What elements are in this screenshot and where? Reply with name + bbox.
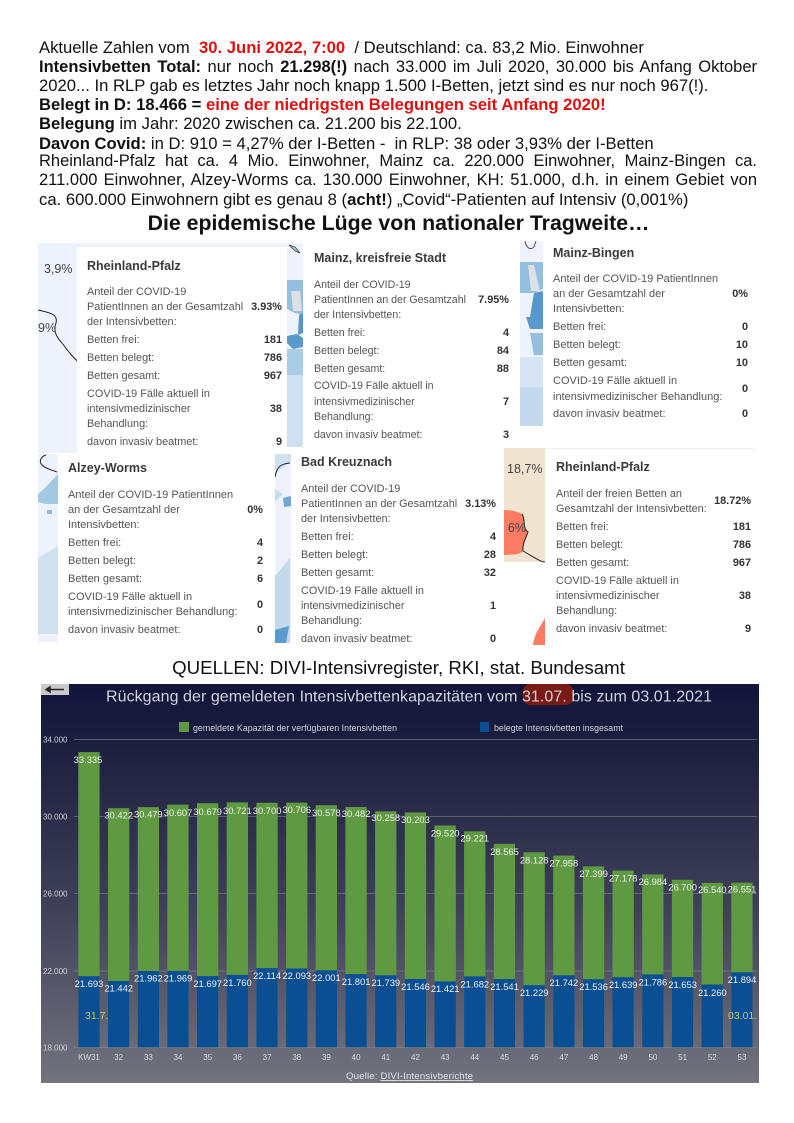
capacity value labels: 30.203 — [401, 814, 430, 825]
occupied value labels: 21.742 — [550, 977, 578, 988]
table: bed figures: 4 — [503, 326, 509, 338]
table: bed figures: der Intensivbetten: — [87, 316, 177, 328]
table: bed figures: Betten belegt: — [553, 338, 621, 350]
table: bed figures: PatientInnen an der Gesamtzahl — [314, 294, 466, 306]
table: bed figures: Betten belegt: — [314, 344, 379, 356]
table: bed figures: 1 — [490, 600, 496, 612]
table: bed figures: intensivmedizinischer — [314, 396, 415, 408]
grid lines and y axis: 34.000 — [43, 736, 68, 744]
table: bed figures: intensivmedizinischer — [87, 402, 191, 414]
table: bed figures: 0 — [742, 320, 748, 332]
table: bed figures: COVID-19 Fälle aktuell in — [553, 374, 677, 386]
table: bed figures: 0 — [742, 382, 748, 394]
heading: epidemic lie: Die epidemische Lüge von nationaler Tragweite… — [148, 211, 649, 235]
table: bed figures: 967 — [733, 556, 751, 568]
table: bed figures: Bad Kreuznach — [301, 455, 392, 469]
capacity value labels: 28.128 — [520, 854, 549, 866]
x axis labels: 32 — [114, 1053, 124, 1062]
occupied value labels: 21.546 — [401, 981, 430, 992]
table: bed figures — [314, 251, 509, 440]
x axis labels: 36 — [233, 1053, 242, 1062]
table: bed figures: 2 — [257, 554, 263, 566]
table: bed figures: 38 — [739, 590, 751, 602]
table: bed figures: 7.95% — [478, 294, 509, 306]
table: bed figures: intensivmedizinischer Behandlung: — [68, 606, 237, 618]
table: bed figures: Betten frei: — [314, 326, 365, 338]
occupied value labels — [75, 970, 756, 998]
blue occupied bars — [78, 968, 753, 1047]
x axis labels — [78, 1053, 747, 1062]
table: bed figures: Betten belegt: — [87, 352, 154, 364]
table: bed figures — [301, 455, 496, 643]
panel: Rheinland-Pfalz free beds: 18,7% — [507, 462, 542, 476]
text block: current figures — [39, 38, 757, 209]
occupied value labels: 21.229 — [520, 987, 549, 998]
capacity value labels: 30.479 — [134, 808, 163, 820]
x axis labels: 48 — [589, 1053, 599, 1062]
table: bed figures: 0% — [247, 504, 263, 516]
map: Mainz region strip — [287, 243, 303, 447]
grid lines and y axis: 30.000 — [43, 812, 68, 822]
table: bed figures: Behandlung: — [556, 604, 617, 616]
table: bed figures: intensivmedizinischer — [556, 590, 660, 602]
table: bed figures: der Intensivbetten: — [314, 308, 401, 320]
table: bed figures: davon invasiv beatmet: — [314, 428, 422, 440]
occupied value labels: 21.962 — [134, 972, 163, 984]
table: bed figures: davon invasiv beatmet: — [553, 408, 666, 420]
x axis labels: 37 — [263, 1053, 272, 1062]
grid lines and y axis — [43, 736, 757, 1052]
table: bed figures: 3.13% — [465, 498, 496, 510]
table: bed figures: 6 — [257, 572, 263, 584]
capacity value labels: 30.721 — [223, 805, 252, 816]
capacity value labels: 26.700 — [668, 882, 697, 892]
table: bed figures — [556, 460, 751, 634]
table: bed figures: PatientInnen an der Gesamtzahl — [301, 498, 457, 510]
table: bed figures: Anteil der COVID-19 PatientInnen — [553, 272, 718, 284]
capacity value labels — [74, 754, 756, 895]
table: bed figures: 3 — [503, 428, 509, 440]
table: bed figures: 38 — [270, 402, 282, 414]
legend: belegte Intensivbetten insgesamt — [494, 723, 624, 733]
table: bed figures: Mainz, kreisfreie Stadt — [314, 251, 446, 265]
text block: current figures: Intensivbetten Total: nur noch 21.298(!) nach 33.000 im Juli 2020, 30.000 bis Anfang Oktober — [39, 58, 757, 76]
table: bed figures: Anteil der COVID-19 PatientInnen — [68, 488, 233, 500]
x axis labels: 43 — [441, 1053, 450, 1062]
legend — [179, 722, 624, 733]
table: bed figures: Betten belegt: — [556, 538, 623, 550]
table: bed figures: Gesamtzahl der Intensivbetten: — [556, 502, 707, 514]
date annotations: 31.7. — [85, 1010, 108, 1022]
x axis labels: 41 — [381, 1053, 391, 1062]
table: bed figures: davon invasiv beatmet: — [68, 624, 181, 636]
occupied value labels: 21.536 — [579, 981, 608, 992]
occupied value labels: 21.541 — [490, 981, 519, 992]
x axis labels: 38 — [292, 1053, 302, 1062]
table: bed figures: 3.93% — [251, 300, 282, 312]
x axis labels: 40 — [352, 1053, 361, 1062]
table: bed figures: Alzey-Worms — [68, 461, 147, 475]
x axis labels: 49 — [619, 1053, 628, 1062]
table: bed figures: 0 — [257, 624, 263, 636]
table: bed figures: Betten frei: — [556, 520, 609, 532]
x axis labels: 53 — [738, 1053, 747, 1062]
occupied value labels: 21.801 — [342, 976, 370, 987]
text block: current figures: 211.000 Einwohner, Alzey-Worms ca. 130.000 Einwohner, KH: 51.000, d.h. in einem Gebiet von — [39, 171, 757, 189]
x axis labels: 33 — [144, 1053, 153, 1062]
x axis labels: 46 — [530, 1053, 539, 1062]
table: bed figures: Mainz-Bingen — [553, 246, 634, 260]
x axis labels: 51 — [678, 1053, 688, 1062]
occupied value labels: 21.760 — [223, 977, 252, 988]
chart title: Rückgang der gemeldeten Intensivbettenkapazitäten vom 31.07. bis zum 03.01.2021 — [106, 688, 712, 706]
panel: Mainz-Bingen — [520, 241, 755, 426]
capacity value labels: 33.335 — [74, 754, 102, 765]
x axis labels: 45 — [500, 1053, 509, 1062]
table: bed figures — [553, 246, 748, 420]
capacity value labels: 28.565 — [490, 846, 519, 857]
occupied value labels: 21.786 — [639, 976, 667, 988]
source note: Quelle: DIVI-Intensivberichte — [346, 1071, 473, 1082]
table: bed figures: Betten gesamt: — [553, 356, 627, 368]
table: bed figures: 786 — [264, 352, 282, 364]
occupied value labels: 21.697 — [193, 978, 222, 989]
table: bed figures — [68, 461, 263, 636]
capacity value labels: 30.578 — [312, 807, 341, 818]
grid lines and y axis: 18.000 — [43, 1044, 68, 1052]
occupied value labels: 21.421 — [431, 983, 460, 994]
table: bed figures: 9 — [745, 622, 751, 634]
occupied value labels: 21.739 — [371, 977, 400, 988]
table: bed figures: 181 — [733, 520, 751, 532]
heading: sources: QUELLEN: DIVI-Intensivregister, RKI, stat. Bundesamt — [172, 657, 625, 678]
occupied value labels: 22.114 — [253, 970, 281, 981]
table: bed figures: Betten belegt: — [301, 548, 368, 560]
table: bed figures: Anteil der COVID-19 — [301, 482, 400, 494]
table: bed figures: Betten frei: — [68, 536, 121, 548]
map: Alzey-Worms strip — [38, 454, 58, 642]
text block: current figures: 2020... In RLP gab es letztes Jahr noch knapp 1.500 I-Betten, jetzt sind es nur noch 967(!). — [39, 76, 708, 95]
occupied value labels: 21.442 — [104, 982, 133, 994]
grid lines and y axis: 22.000 — [43, 967, 68, 976]
occupied value labels: 21.894 — [728, 974, 756, 985]
capacity value labels: 30.482 — [342, 808, 370, 819]
x axis labels: 39 — [322, 1053, 331, 1062]
table: bed figures: 10 — [736, 356, 748, 368]
map: free-bed share strip — [504, 448, 754, 645]
panel: Rheinland-Pfalz covid share — [38, 243, 287, 453]
x axis labels: KW31 — [78, 1053, 100, 1062]
table: bed figures: 4 — [257, 536, 263, 548]
table: bed figures: Betten frei: — [553, 320, 606, 332]
date annotations: 03.01. — [728, 1010, 757, 1022]
table: bed figures: 32 — [484, 566, 496, 578]
capacity value labels: 26.540 — [698, 884, 727, 895]
x axis labels: 35 — [203, 1053, 213, 1062]
table: bed figures: 9 — [276, 436, 282, 448]
panel: Rheinland-Pfalz covid share: 3,9% — [44, 262, 72, 276]
table: bed figures: Betten gesamt: — [301, 566, 374, 578]
capacity value labels: 27.178 — [609, 872, 638, 884]
panel: Rheinland-Pfalz covid share: 9% — [38, 321, 56, 335]
x axis labels: 34 — [174, 1053, 183, 1062]
occupied value labels: 21.969 — [164, 972, 192, 984]
text block: current figures: Belegung im Jahr: 2020 zwischen ca. 21.200 bis 22.100. — [39, 114, 462, 133]
table: bed figures: PatientInnen an der Gesamtzahl — [87, 300, 243, 312]
table: bed figures: 88 — [497, 362, 509, 374]
map: Bad Kreuznach strip — [275, 454, 291, 643]
table: bed figures: 181 — [264, 334, 282, 346]
table: bed figures: Betten gesamt: — [68, 572, 142, 584]
text block: current figures: Aktuelle Zahlen vom 30. Juni 2022, 7:00 / Deutschland: ca. 83,2 Mio. Einwohner — [39, 38, 644, 57]
date annotations — [85, 1010, 757, 1022]
table: bed figures: der Intensivbetten: — [301, 512, 391, 524]
table: bed figures: Behandlung: — [314, 410, 374, 422]
table: bed figures: Rheinland-Pfalz — [87, 259, 181, 273]
text block: current figures: ca. 600.000 Einwohnern gibt es genau 8 (acht!) „Covid“-Patienten auf Intensiv (0,001%) — [39, 190, 688, 209]
table: bed figures: Rheinland-Pfalz — [556, 460, 650, 474]
map: Mainz-Bingen strip — [520, 241, 543, 426]
table: bed figures: Betten gesamt: — [87, 370, 160, 382]
green capacity bars — [78, 752, 753, 1047]
table: bed figures: COVID-19 Fälle aktuell in — [314, 380, 434, 392]
x axis labels: 44 — [470, 1053, 480, 1062]
panel: Rheinland-Pfalz free beds — [504, 448, 754, 646]
text block: current figures: Belegt in D: 18.466 = eine der niedrigsten Belegungen seit Anfang 2020! — [39, 95, 606, 114]
text block: current figures: Davon Covid: in D: 910 = 4,27% der I-Betten - in RLP: 38 oder 3,93% der I-Betten — [39, 134, 654, 153]
table: bed figures: 786 — [733, 538, 751, 550]
table: bed figures: COVID-19 Fälle aktuell in — [68, 590, 192, 602]
table: bed figures: Anteil der COVID-19 — [87, 286, 186, 298]
table: bed figures: 967 — [264, 370, 282, 382]
table: bed figures: 0 — [742, 408, 748, 420]
table: bed figures: Intensivbetten: — [553, 302, 625, 314]
table: bed figures: 84 — [497, 344, 509, 356]
capacity value labels: 30.258 — [371, 812, 400, 823]
capacity value labels: 30.700 — [253, 805, 281, 816]
table: bed figures: 0% — [732, 288, 748, 300]
panel: Bad Kreuznach — [275, 454, 504, 643]
x axis labels: 42 — [411, 1053, 420, 1062]
table: bed figures: Betten belegt: — [68, 554, 136, 566]
occupied value labels: 21.653 — [668, 979, 697, 990]
text block: current figures: Rheinland-Pfalz hat ca. 4 Mio. Einwohner, Mainz ca. 220.000 Einwohner, Mainz-Bingen ca. — [39, 152, 757, 170]
capacity value labels: 27.958 — [550, 858, 578, 868]
capacity value labels: 30.422 — [104, 810, 133, 820]
occupied value labels: 21.693 — [75, 978, 103, 989]
table: bed figures: davon invasiv beatmet: — [87, 436, 198, 448]
table: bed figures: 4 — [490, 530, 496, 542]
occupied value labels: 21.260 — [698, 987, 727, 998]
back button icon — [41, 684, 69, 695]
table: bed figures: an der Gesamtzahl der — [553, 288, 665, 300]
panel: Rheinland-Pfalz free beds: 6% — [508, 521, 526, 535]
table: bed figures: an der Gesamtzahl der — [68, 504, 180, 516]
occupied value labels: 21.639 — [609, 979, 638, 990]
table: bed figures: Betten frei: — [301, 530, 354, 542]
table: bed figures: Betten frei: — [87, 334, 140, 346]
x axis labels: 50 — [648, 1053, 658, 1062]
panel: Mainz — [287, 243, 520, 447]
x axis labels: 47 — [559, 1053, 569, 1062]
table: bed figures: davon invasiv beatmet: — [556, 622, 667, 634]
table: bed figures: COVID-19 Fälle aktuell in — [301, 584, 424, 596]
chart: reported ICU capacity — [41, 684, 759, 1083]
table: bed figures: 28 — [484, 548, 496, 560]
table: bed figures: Anteil der freien Betten an — [556, 488, 682, 500]
table: bed figures: Behandlung: — [87, 418, 148, 430]
panel: Alzey-Worms — [38, 454, 275, 642]
table: bed figures: intensivmedizinischer — [301, 600, 405, 612]
table: bed figures: Intensivbetten: — [68, 518, 140, 530]
occupied value labels: 22.001 — [312, 972, 341, 983]
table: bed figures: intensivmedizinischer Behandlung: — [553, 390, 722, 402]
capacity value labels: 27.399 — [579, 868, 608, 879]
capacity value labels: 29.520 — [431, 828, 460, 838]
table: bed figures: 18.72% — [714, 494, 751, 506]
table: bed figures: COVID-19 Fälle aktuell in — [87, 388, 210, 400]
capacity value labels: 30.607 — [164, 807, 192, 818]
capacity value labels: 30.679 — [193, 806, 222, 817]
occupied value labels: 21.682 — [460, 978, 489, 990]
capacity value labels: 30.706 — [282, 804, 311, 815]
table: bed figures: 10 — [736, 338, 748, 350]
capacity value labels: 26.984 — [639, 876, 667, 887]
capacity value labels: 29.221 — [460, 832, 489, 844]
table: bed figures: Betten gesamt: — [314, 362, 385, 374]
table: bed figures: Betten gesamt: — [556, 556, 629, 568]
x axis labels: 52 — [708, 1053, 717, 1062]
map: Rheinland-Pfalz surroundings — [38, 243, 287, 453]
legend: gemeldete Kapazität der verfügbaren Intensivbetten — [193, 723, 397, 733]
grid lines and y axis: 26.000 — [43, 890, 68, 898]
table: bed figures: COVID-19 Fälle aktuell in — [556, 574, 679, 586]
table: bed figures: 7 — [503, 396, 509, 408]
table: bed figures — [87, 259, 282, 448]
capacity value labels: 26.551 — [728, 884, 756, 894]
table: bed figures: Anteil der COVID-19 — [314, 278, 411, 290]
table: bed figures: 0 — [257, 598, 263, 610]
occupied value labels: 22.093 — [282, 970, 311, 981]
table: bed figures: Behandlung: — [301, 614, 362, 626]
